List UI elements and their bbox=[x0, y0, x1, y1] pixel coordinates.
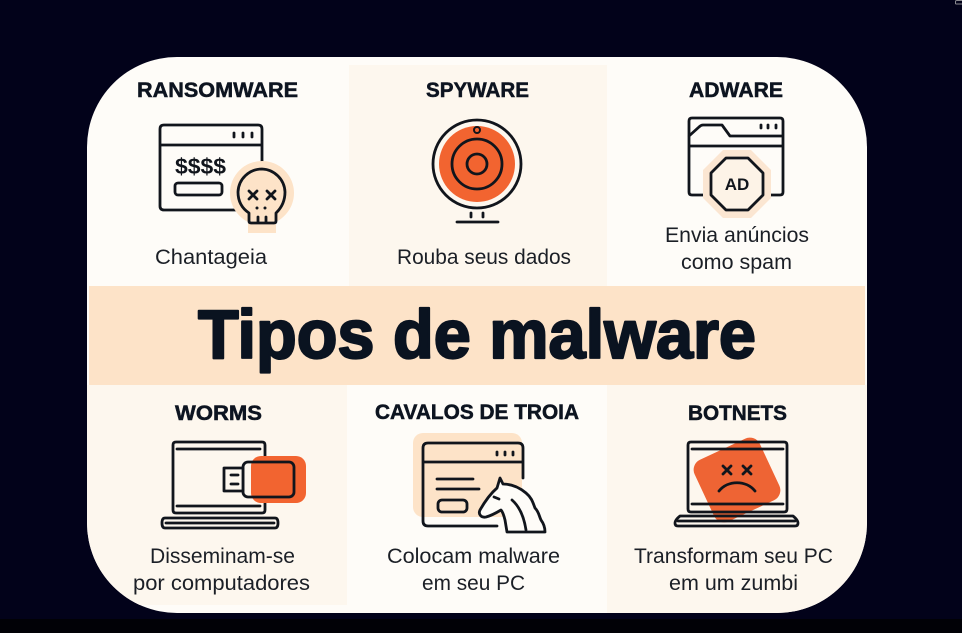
label: cavalos de troia bbox=[387, 545, 560, 595]
title band bbox=[89, 286, 865, 385]
panel: card background bbox=[87, 57, 867, 613]
panel: worms bbox=[133, 402, 310, 595]
panel: cavalos de troia bbox=[375, 401, 579, 595]
panel: adware bbox=[665, 79, 809, 274]
label: worms: Disseminam-se bbox=[150, 545, 295, 568]
icon: laptop with zombie face bbox=[675, 434, 798, 526]
icon: browser with ad sign bbox=[689, 118, 783, 218]
label: cavalos de troia: Colocam malware bbox=[387, 545, 560, 568]
panel: spyware bbox=[397, 79, 571, 269]
label: worms: por computadores bbox=[133, 572, 310, 595]
heading: cavalos de troia: CAVALOS DE TROIA bbox=[375, 401, 579, 424]
heading: spyware: SPYWARE bbox=[426, 79, 529, 102]
label: botnets: Transformam seu PC bbox=[634, 545, 833, 568]
icon: laptop with usb drive bbox=[162, 442, 306, 528]
label: adware bbox=[665, 224, 809, 274]
heading: worms: WORMS bbox=[175, 402, 262, 425]
label: botnets bbox=[634, 545, 833, 595]
label: adware: Envia anúncios bbox=[665, 224, 809, 247]
label: worms bbox=[133, 545, 310, 595]
heading: botnets: BOTNETS bbox=[688, 402, 787, 425]
icon: ransom window with skull bbox=[160, 125, 294, 233]
icon: browser with ad sign: AD bbox=[725, 175, 749, 194]
label: cavalos de troia: em seu PC bbox=[422, 572, 525, 595]
title: Tipos de malware bbox=[198, 296, 756, 373]
heading: adware: ADWARE bbox=[689, 79, 783, 102]
label: spyware: Rouba seus dados bbox=[397, 246, 571, 269]
panel: botnets bbox=[634, 402, 833, 595]
icon: ransom window with skull: $$$$ bbox=[175, 154, 226, 179]
icon: window with trojan horse bbox=[413, 433, 545, 532]
label: ransomware: Chantageia bbox=[155, 246, 267, 269]
panel: ransomware bbox=[137, 79, 298, 269]
label: adware: como spam bbox=[681, 251, 792, 274]
heading: ransomware: RANSOMWARE bbox=[137, 79, 298, 102]
label: botnets: em um zumbi bbox=[669, 572, 798, 595]
icon: webcam bbox=[433, 120, 521, 222]
